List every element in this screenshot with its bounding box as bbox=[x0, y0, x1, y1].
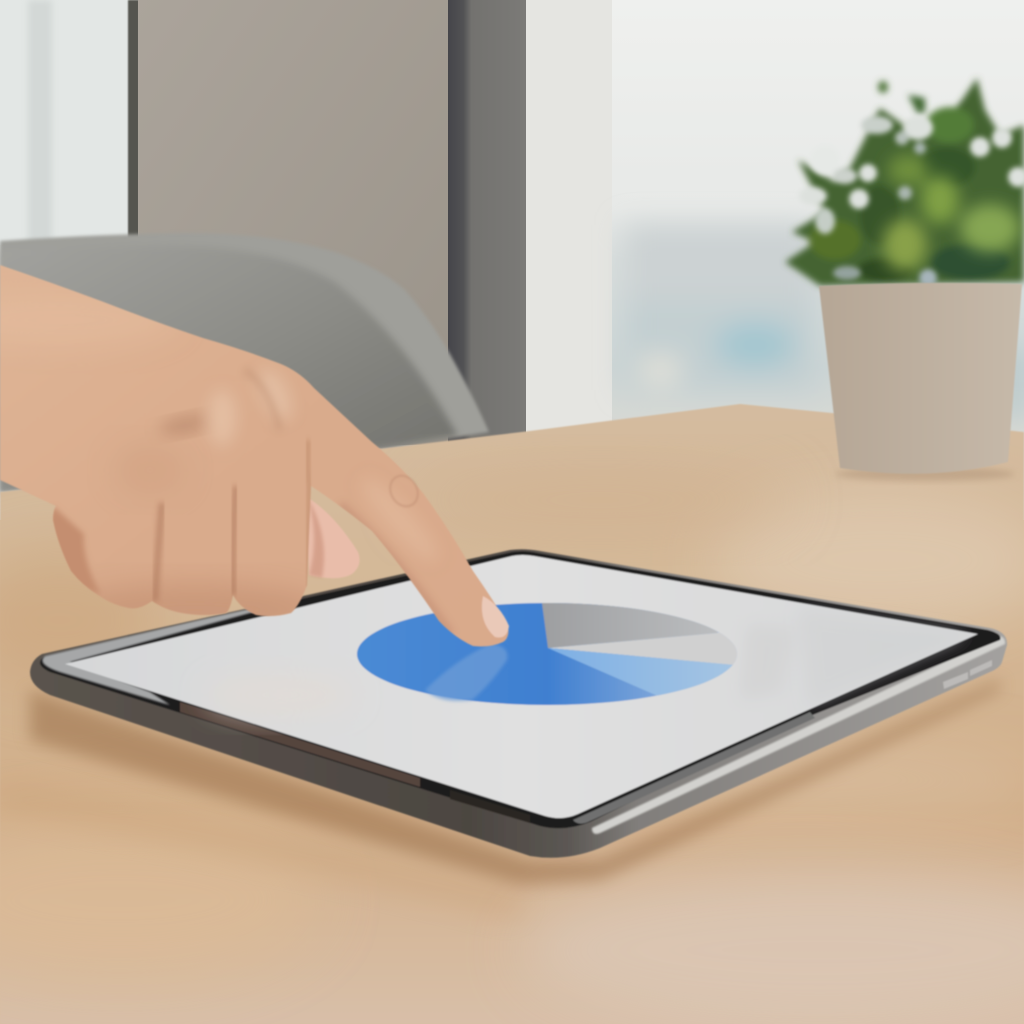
table lighting and grain bbox=[0, 470, 1024, 1024]
dark column bbox=[448, 0, 526, 445]
metal rim highlight front right bbox=[592, 636, 1005, 834]
pie light blue slice bbox=[550, 648, 724, 696]
tablet body bbox=[30, 549, 1007, 858]
bezel bbox=[40, 551, 1000, 828]
blurred city view bbox=[625, 225, 1024, 420]
side buttons bbox=[943, 672, 968, 689]
white column bbox=[526, 0, 614, 440]
wall panel bbox=[138, 0, 452, 445]
plant pot bbox=[819, 283, 1022, 474]
index finger, back of hand and curled fingers bbox=[0, 265, 508, 646]
knuckle creases bbox=[385, 471, 423, 511]
light leaves bbox=[883, 154, 1020, 271]
finger reflection bbox=[425, 644, 507, 701]
tucked finger bbox=[307, 497, 360, 578]
screen reflections bbox=[740, 625, 795, 700]
hand bbox=[0, 265, 509, 646]
right window bbox=[612, 0, 1024, 432]
tablet bbox=[30, 549, 1007, 858]
tablet shadow bbox=[30, 680, 1000, 885]
background: window and wall bbox=[0, 0, 1024, 520]
finger separations bbox=[155, 503, 162, 601]
pie grey slice bbox=[541, 602, 718, 649]
pie light grey slice bbox=[550, 632, 738, 666]
hand shading bbox=[52, 371, 452, 631]
bezel reflections bbox=[43, 598, 300, 705]
plant foliage bbox=[785, 78, 1024, 287]
gaps between leaves bbox=[799, 116, 1024, 287]
chair bbox=[0, 233, 489, 492]
plant pot shadow bbox=[835, 467, 1015, 481]
tablet screen bbox=[65, 555, 978, 818]
pie chart bbox=[356, 602, 736, 706]
left window bbox=[0, 0, 130, 245]
fingernail bbox=[482, 596, 509, 638]
table bbox=[0, 404, 1024, 1024]
palm fold bbox=[52, 508, 98, 593]
pie main blue slice bbox=[357, 603, 737, 705]
